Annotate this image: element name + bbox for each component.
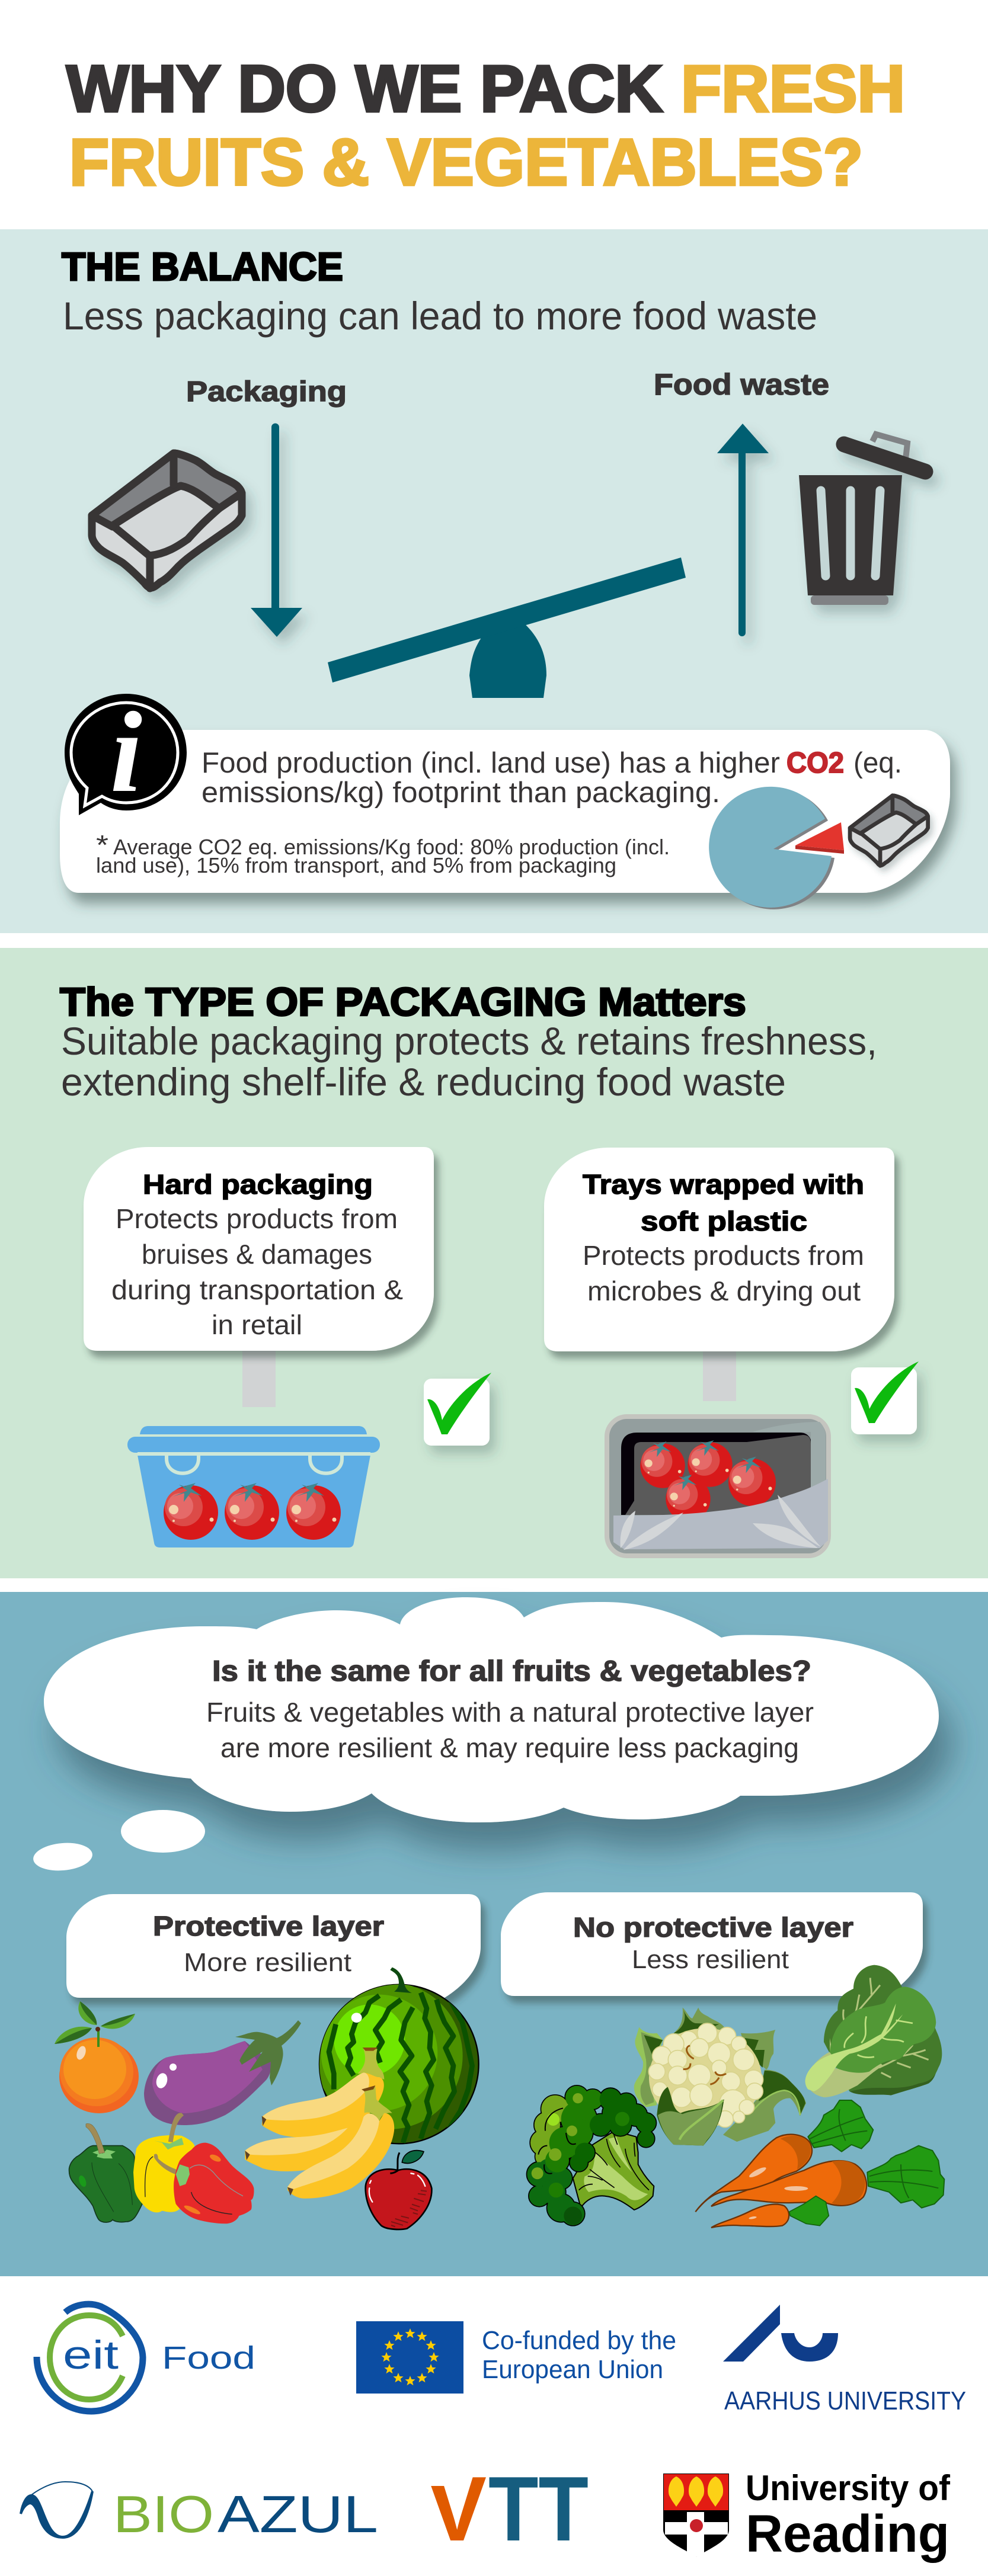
icon: packaging tray — [92, 453, 242, 588]
panel: type of packaging — [0, 948, 988, 1578]
icon: trash can — [799, 434, 925, 605]
icon: red pepper — [174, 2143, 254, 2223]
callout: protective layer — [66, 1894, 481, 1998]
logo: bioazul: BIO — [113, 2485, 214, 2543]
text: question: Is it the same for all fruits & vegetables? — [212, 1655, 811, 1687]
label: packaging: Packaging — [186, 376, 347, 408]
logo: bioazul: AZUL — [218, 2485, 378, 2543]
callout: protective layer: Protective layer — [153, 1911, 384, 1941]
logo: university of reading — [663, 2468, 951, 2563]
icon: green pepper — [69, 2123, 142, 2222]
callout: trays wrapped with soft plastic — [544, 1148, 894, 1351]
logo: european union: European Union — [482, 2355, 663, 2384]
logo: university of reading: University of — [746, 2468, 951, 2508]
callout: protective layer: More resilient — [184, 1948, 351, 1977]
icon: hard container with tomatoes — [127, 1426, 380, 1547]
logo: vtt: V — [427, 2458, 487, 2560]
panel: all fruits and vegetables — [0, 1592, 988, 2276]
arrow: packaging down — [251, 423, 302, 637]
text: food production: Food production (incl. land use) has a higher — [202, 747, 780, 779]
title — [66, 52, 905, 199]
footnote: * — [96, 829, 108, 860]
icon: eggplant — [144, 2020, 301, 2125]
callout: hard packaging: in retail — [212, 1309, 302, 1340]
logo: aarhus university — [723, 2305, 966, 2415]
callout: hard packaging: during transportation & — [111, 1274, 403, 1305]
callout: trays wrapped with soft plastic: soft plastic — [641, 1206, 807, 1236]
thought cloud — [32, 1597, 939, 1873]
icon: tray with soft plastic and tomatoes — [607, 1417, 829, 1556]
logo: vtt — [422, 2458, 589, 2560]
seesaw — [328, 558, 686, 698]
title: FRUITS & VEGETABLES? — [69, 126, 863, 199]
post: hard packaging — [242, 1348, 276, 1407]
callout: hard packaging — [84, 1147, 434, 1351]
heading: the balance: THE BALANCE — [62, 245, 343, 289]
logo: university of reading: Reading — [746, 2504, 949, 2563]
icon: watermelon — [316, 1968, 479, 2144]
icon: bananas — [245, 2048, 394, 2199]
subheading: Suitable packaging protects & retains freshness, — [61, 1019, 877, 1063]
logo: bioazul — [21, 2482, 378, 2543]
footnote: land use), 15% from transport, and 5% from packaging — [96, 853, 616, 877]
text: food production: emissions/kg) footprint than packaging. — [202, 777, 720, 809]
panel: the balance — [0, 229, 988, 933]
logo: eit food — [37, 2304, 255, 2411]
post: trays — [703, 1348, 736, 1401]
icon: check mark 1 — [424, 1373, 491, 1446]
logo: vtt: TT — [488, 2458, 589, 2560]
icon: broccoli — [527, 2086, 656, 2225]
text: answer: are more resilient & may require less packaging — [220, 1732, 799, 1763]
callout: hard packaging: Protects products from — [116, 1203, 398, 1234]
callout: hard packaging: bruises & damages — [142, 1239, 372, 1270]
icon: info bubble: i — [110, 688, 142, 816]
subheading — [61, 1019, 877, 1104]
label: food waste: Food waste — [654, 368, 829, 401]
arrow: food waste up — [717, 424, 769, 636]
icon: lettuce — [805, 1965, 942, 2097]
icon: small tray — [850, 796, 928, 866]
logo: european union — [356, 2321, 676, 2394]
heading: type of packaging: The TYPE OF PACKAGING Matters — [60, 980, 746, 1024]
icon: apple — [366, 2151, 431, 2229]
callout: no protective layer: Less resilient — [632, 1945, 789, 1974]
callout: trays wrapped with soft plastic: microbes & drying out — [587, 1276, 861, 1306]
icon: cauliflower — [634, 2007, 806, 2146]
text: food production: CO2 — [786, 747, 844, 779]
callout: no protective layer: No protective layer — [573, 1912, 853, 1943]
callout: trays wrapped with soft plastic: Trays wrapped with — [583, 1169, 864, 1200]
callout: no protective layer — [501, 1892, 923, 1996]
logo: eit food: Food — [162, 2340, 255, 2376]
icon: yellow pepper — [133, 2113, 194, 2212]
logo: eit food: eit — [63, 2333, 119, 2378]
text: answer — [206, 1697, 814, 1763]
callout: hard packaging: Hard packaging — [143, 1169, 373, 1200]
callout: trays wrapped with soft plastic: Protects products from — [583, 1240, 864, 1271]
text: answer: Fruits & vegetables with a natural protective layer — [206, 1697, 814, 1728]
icon: check mark 2 — [851, 1361, 919, 1434]
icon: info bubble — [65, 688, 187, 816]
footnote: Average CO2 eq. emissions/Kg food: 80% production (incl. — [113, 835, 670, 859]
subheading: Less packaging can lead to more food waste — [63, 294, 817, 338]
logo: european union: Co-funded by the — [482, 2326, 676, 2355]
subheading: extending shelf-life & reducing food waste — [61, 1060, 786, 1104]
pie chart: emissions share — [709, 787, 844, 909]
callout: co2 footprint — [60, 688, 950, 909]
text: food production — [202, 747, 902, 809]
text: food production: (eq. — [853, 747, 902, 779]
title: WHY DO WE PACK FRESH — [66, 52, 905, 126]
icon: orange — [55, 2001, 139, 2113]
footnote — [96, 829, 670, 877]
icon: carrots — [695, 2100, 944, 2228]
